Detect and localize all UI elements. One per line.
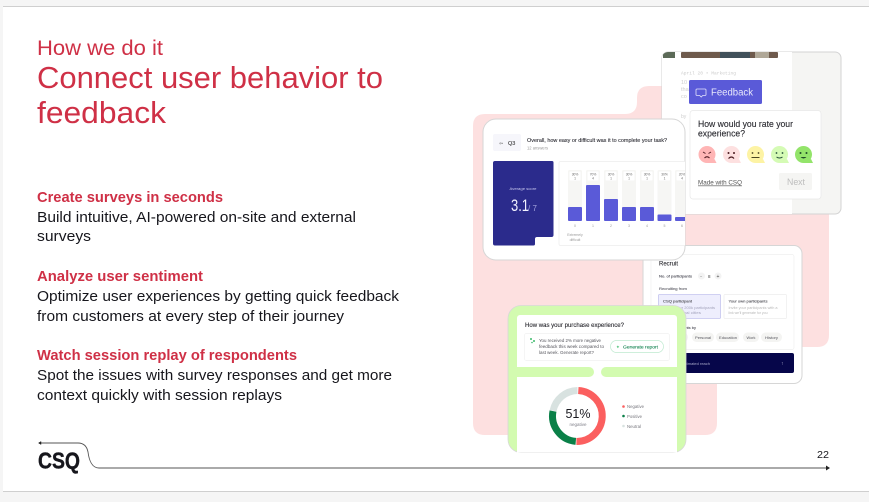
generate report button — [610, 340, 664, 352]
icon: sparkle — [530, 338, 535, 343]
text block: analyze sentiment: from customers at every step of their journey — [37, 308, 345, 325]
panel: recruit: Personal — [695, 335, 711, 340]
question text: 12 answers — [527, 146, 549, 150]
value labels: 30% — [608, 172, 614, 176]
label chips — [570, 172, 688, 180]
panel: recruit: − — [700, 274, 703, 278]
text block: create surveys: surveys — [37, 228, 91, 245]
panel: recruit: + — [716, 274, 720, 280]
text block: session replay: Watch session replay of respondents — [37, 347, 297, 364]
icon: very happy face — [795, 146, 813, 163]
question tag: ⇦ — [499, 141, 503, 147]
question tag: Q3 — [508, 141, 515, 147]
generate report button: Generate report — [623, 344, 659, 350]
feedback button: Feedback — [711, 88, 754, 98]
rating card: experience? — [698, 128, 745, 138]
average score card: 3.1 — [511, 196, 529, 215]
panel: recruit: Recruit — [659, 260, 678, 268]
panel: feedback widget: 10 — [681, 80, 687, 86]
text block: session replay: context quickly with session replays — [37, 387, 282, 404]
white card body — [517, 315, 677, 452]
pink backdrop shape — [473, 86, 829, 435]
value labels: 30% — [626, 172, 632, 176]
axis labels: 1 — [592, 224, 594, 228]
panel: recruit: across global cities — [663, 311, 701, 315]
panel: recruit: 8 — [708, 274, 711, 279]
axis labels — [567, 224, 683, 242]
panel: recruit: Your own participants — [728, 298, 768, 304]
panel: feedback widget — [662, 52, 841, 214]
panel: survey results — [483, 119, 694, 260]
panel: feedback widget: by — [681, 114, 687, 120]
icon: neutral face — [747, 146, 765, 163]
icon: feedback bubble — [696, 89, 706, 97]
icon: unhappy face — [723, 146, 741, 163]
axis labels: 2 — [610, 224, 612, 228]
footer line with arrow — [38, 442, 830, 470]
axis labels: 3 — [628, 224, 630, 228]
rating card: Next — [787, 177, 805, 187]
photo strip — [663, 52, 675, 58]
panel: recruit: History — [765, 335, 778, 340]
value labels: 1 — [574, 176, 576, 180]
feedback button — [689, 80, 762, 104]
value labels: 4 — [592, 176, 594, 180]
panel: recruit: ↑ — [781, 361, 784, 367]
panel: feedback widget: tha — [681, 87, 690, 93]
value labels: 30% — [661, 172, 668, 176]
average score card — [493, 161, 554, 246]
divider pills — [517, 367, 594, 377]
top card: last week. Generate report? — [539, 350, 594, 355]
panel: recruit: Invite your participants with a — [728, 306, 778, 310]
donut chart — [553, 390, 602, 441]
panel: recruit: No. of participants — [659, 274, 692, 278]
panel: recruit: Estimated reach — [681, 361, 710, 366]
rating card: Made with CSQ — [698, 180, 742, 186]
text block: session replay: Spot the issues with survey responses and get more — [37, 367, 392, 384]
panel: recruit: Access our 200k participants — [663, 306, 715, 310]
text block: analyze sentiment — [37, 268, 400, 325]
legend — [622, 404, 644, 429]
legend: Neutral — [627, 424, 641, 429]
axis labels: Extremely — [567, 233, 583, 237]
bar chart — [559, 162, 694, 246]
page number: 22 — [817, 449, 829, 461]
value labels: 30% — [644, 172, 650, 176]
generate report button: ✦ — [616, 344, 620, 350]
text block: session replay — [37, 347, 392, 404]
eyebrow heading: How we do it — [37, 37, 163, 60]
axis labels: 6 — [681, 224, 683, 228]
panel: recruit: link we'll generate for you — [728, 311, 768, 315]
panel: feedback widget: co — [681, 94, 687, 100]
value labels: 4 — [681, 176, 683, 180]
axis labels: 4 — [646, 224, 648, 228]
panel: recruit: Filter participants by — [660, 325, 696, 330]
text block: create surveys: Create surveys in seconds — [37, 189, 223, 206]
donut label: negative — [569, 422, 587, 427]
panel: recruit — [643, 246, 802, 384]
title: feedback — [37, 95, 167, 130]
top card: feedback this week compared to — [539, 344, 604, 349]
question tag — [493, 134, 521, 151]
rating card — [690, 110, 821, 199]
article meta: April 20 • Marketing — [681, 70, 736, 76]
panel: recruit: CSQ participant — [663, 298, 693, 304]
value labels: 1 — [628, 176, 630, 180]
text block: header — [37, 37, 383, 130]
text block: analyze sentiment: Optimize user experiences by getting quick feedback — [37, 288, 400, 305]
donut label: 51% — [565, 407, 591, 421]
average score card: Average score — [510, 186, 537, 191]
question text — [527, 138, 667, 150]
value labels: 1 — [664, 176, 666, 180]
axis labels: 5 — [664, 224, 666, 228]
text block: analyze sentiment: Analyze user sentiment — [37, 268, 203, 285]
title — [37, 60, 383, 130]
bar tracks — [568, 170, 685, 217]
top card: You received 2% more negative — [539, 338, 601, 343]
text block: create surveys — [37, 189, 356, 245]
axis labels: difficult — [570, 238, 580, 242]
legend: Positive — [627, 414, 642, 419]
panel: recruit: Recruiting from — [659, 286, 688, 291]
rating card: How would you rate your — [698, 119, 793, 129]
value labels: 30% — [572, 172, 578, 176]
panel: recruit: Work — [746, 335, 756, 340]
text block: create surveys: Build intuitive, AI-powered on-site and external — [37, 209, 356, 226]
top card — [524, 322, 670, 360]
value labels: 20% — [679, 172, 685, 176]
value labels: 1 — [646, 176, 648, 180]
value labels: 70% — [590, 172, 596, 176]
value labels: 1 — [610, 176, 612, 180]
question text: Overall, how easy or difficult was it to complete your task? — [527, 138, 667, 144]
panel: recruit: Education — [719, 335, 737, 340]
icon: happy face — [771, 146, 789, 163]
legend: Negative — [627, 404, 644, 409]
icon: very unhappy face — [698, 146, 716, 163]
title: Connect user behavior to — [37, 60, 383, 95]
axis labels: 0 — [574, 224, 576, 228]
panel: purchase experience — [508, 306, 686, 452]
top card: How was your purchase experience? — [525, 322, 624, 329]
average score card: / 7 — [528, 204, 537, 213]
logo: CSQ — [38, 448, 80, 474]
value labels — [572, 173, 685, 180]
bars — [568, 185, 689, 221]
